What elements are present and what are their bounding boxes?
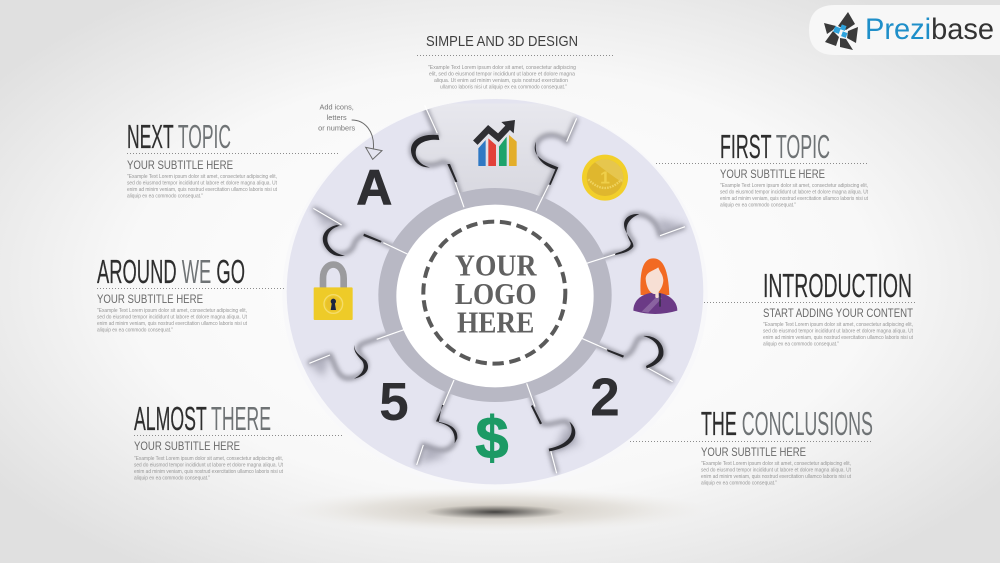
logo text: YOUR xyxy=(455,248,537,282)
text block: next topic: YOUR SUBTITLE HERE xyxy=(127,158,233,172)
text block: next topic: "Example Text Lorem ipsum dolor sit amet, consectetur adipiscing elit, xyxy=(127,174,277,180)
note: add icons: letters xyxy=(327,113,347,122)
text block: almost there: "Example Text Lorem ipsum dolor sit amet, consectetur adipiscing elit, xyxy=(134,456,283,462)
text block: next topic: aliquip ex ea commodo consequat." xyxy=(127,194,203,200)
text block: the conclusions: sed do eiusmod tempor incididunt ut labore et dolore magna aliqua. Ut xyxy=(701,468,852,474)
text block: the conclusions: "Example Text Lorem ipsum dolor sit amet, consectetur adipiscing elit, xyxy=(701,461,851,467)
brand logo: Prezibase: Prezibase xyxy=(865,13,994,46)
note: add icons: or numbers xyxy=(318,124,356,133)
text block: the conclusions: THE CONCLUSIONS xyxy=(701,405,873,442)
seam highlights xyxy=(309,105,685,473)
letter A: A xyxy=(357,160,392,215)
text block: around we go xyxy=(97,253,285,334)
text block: around we go: YOUR SUBTITLE HERE xyxy=(97,292,203,306)
icon: gold coin: 1 xyxy=(600,167,610,187)
text block: introduction: sed do eiusmod tempor incididunt ut labore et dolore magna aliqua. Ut xyxy=(763,328,914,334)
text block: next topic: enim ad minim veniam, quis nostrud exercitation ullamco laboris nisi ut xyxy=(127,187,278,193)
icon: growth chart xyxy=(475,120,517,166)
ground shadow xyxy=(280,488,710,532)
icon: padlock xyxy=(314,265,353,320)
text block: first topic: sed do eiusmod tempor incididunt ut labore et dolore magna aliqua. Ut xyxy=(720,190,868,196)
text block: almost there: ALMOST THERE xyxy=(134,400,271,437)
text block: next topic: NEXT TOPIC xyxy=(127,118,231,155)
note: add icons: Add icons, xyxy=(320,103,354,112)
icon: dollar sign: $ xyxy=(475,404,508,471)
seam shading xyxy=(308,105,685,473)
text block: simple and 3D design xyxy=(417,33,615,90)
chart piece tone xyxy=(416,144,551,196)
text block: first topic: YOUR SUBTITLE HERE xyxy=(720,167,825,181)
white center circle xyxy=(396,205,594,387)
text block: the conclusions xyxy=(630,405,873,486)
text block: introduction: "Example Text Lorem ipsum dolor sit amet, consectetur adipiscing elit, xyxy=(763,322,913,328)
text block: almost there: aliquip ex ea commodo consequat." xyxy=(134,476,210,482)
text block: almost there: sed do eiusmod tempor incididunt ut labore et dolore magna aliqua. Ut xyxy=(134,462,284,468)
text block: first topic xyxy=(656,128,869,208)
text block: around we go: AROUND WE GO xyxy=(97,253,245,290)
text block: the conclusions: enim ad minim veniam, quis nostrud exercitation ullamco laboris nisi ut xyxy=(701,474,852,480)
text block: around we go: "Example Text Lorem ipsum dolor sit amet, consectetur adipiscing elit, xyxy=(97,308,247,314)
text block: simple and 3D design: SIMPLE AND 3D DESIGN xyxy=(426,33,578,50)
text block: the conclusions: aliquip ex ea commodo consequat." xyxy=(701,480,777,486)
icon: gold coin xyxy=(582,155,628,201)
dark socket crescents xyxy=(323,135,664,451)
text block: around we go: aliquip ex ea commodo consequat." xyxy=(97,328,173,334)
puzzle wheel xyxy=(282,99,708,489)
text block: first topic: FIRST TOPIC xyxy=(720,128,830,165)
icon: woman avatar xyxy=(633,258,677,314)
text block: around we go: sed do eiusmod tempor incididunt ut labore et dolore magna aliqua. Ut xyxy=(97,314,248,320)
number 2: 2 xyxy=(590,368,620,427)
text block: simple and 3D design: elit, sed do eiusmod tempor incididunt ut labore et dolore magna xyxy=(429,72,575,78)
dashed logo ring xyxy=(423,222,565,364)
text block: the conclusions: YOUR SUBTITLE HERE xyxy=(701,445,806,459)
text block: simple and 3D design: aliqua. Ut enim ad minim veniam, quis nostrud exercitation xyxy=(434,78,568,84)
text block: simple and 3D design: ullamco laboris nisi ut aliquip ex ea commodo consequat." xyxy=(440,84,567,90)
text block: introduction: enim ad minim veniam, quis nostrud exercitation ullamco laboris nisi ut xyxy=(763,335,914,341)
text block: introduction: START ADDING YOUR CONTENT xyxy=(763,306,914,320)
wheel base xyxy=(287,99,703,484)
text block: next topic: sed do eiusmod tempor incididunt ut labore et dolore magna aliqua. Ut xyxy=(127,180,278,186)
number 5: 5 xyxy=(379,373,409,432)
text block: first topic: enim ad minim veniam, quis nostrud exercitation ullamco laboris nisi ut xyxy=(720,196,869,202)
logo text: HERE xyxy=(457,306,534,340)
text block: simple and 3D design: "Example Text Lorem ipsum dolor sit amet, consectetur adipiscing xyxy=(428,65,576,71)
icon: brand star xyxy=(824,12,858,50)
logo text xyxy=(455,248,537,340)
text block: first topic: aliquip ex ea commodo consequat." xyxy=(720,202,796,208)
text block: almost there: enim ad minim veniam, quis nostrud exercitation ullamco laboris nisi ut xyxy=(134,469,284,475)
logo text: LOGO xyxy=(455,277,536,311)
crisp seam edges xyxy=(339,139,566,226)
text block: around we go: enim ad minim veniam, quis nostrud exercitation ullamco laboris nisi ut xyxy=(97,321,248,327)
text block: almost there: YOUR SUBTITLE HERE xyxy=(134,439,240,453)
note: add icons xyxy=(318,103,382,159)
text block: almost there xyxy=(134,400,343,482)
shaded wedges near sockets xyxy=(308,207,685,463)
gray ring xyxy=(378,188,612,402)
text block: introduction xyxy=(704,267,915,348)
text block: first topic: "Example Text Lorem ipsum dolor sit amet, consectetur adipiscing elit, xyxy=(720,183,868,189)
text block: introduction: aliquip ex ea commodo consequat." xyxy=(763,342,839,348)
outer pale band xyxy=(282,99,708,489)
text block: next topic xyxy=(127,118,340,200)
brand logo: Prezibase xyxy=(809,5,1000,55)
